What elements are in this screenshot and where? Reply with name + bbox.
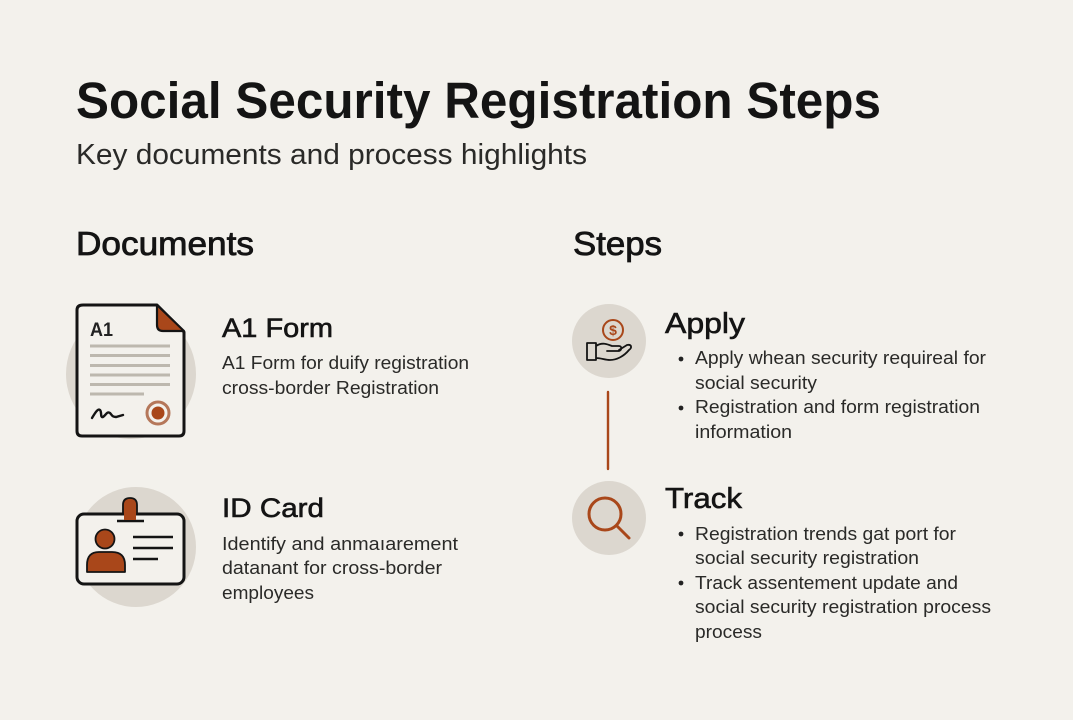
bullet list: Track — [679, 523, 991, 642]
description: A1 Form: A1 Form for duify registration — [222, 352, 469, 373]
description: A1 Form: cross-border Registration — [222, 377, 439, 398]
heading: steps: Steps — [573, 225, 662, 262]
description: ID Card: employees — [222, 582, 314, 603]
icon: hand with coin: $ — [609, 322, 617, 338]
bullet list: Track: Track assentement update and — [695, 572, 958, 593]
icon: ID card — [76, 487, 196, 607]
bullet list: Track: social security registration — [695, 547, 919, 568]
label: Track: Track — [665, 483, 743, 515]
description: ID Card — [222, 533, 458, 603]
label: ID Card: ID Card — [222, 493, 324, 523]
subtitle: Key documents and process highlights — [76, 139, 587, 171]
title: Social Security Registration Steps — [76, 72, 881, 129]
bullet list: Track: process — [695, 621, 762, 642]
bullet list: Apply — [679, 347, 986, 442]
connector line — [607, 392, 609, 469]
bullet list: Apply: Registration and form registration — [695, 396, 980, 417]
icon: magnifying glass — [572, 481, 646, 555]
bullet list: Apply: Apply whean security requireal for — [695, 347, 986, 368]
description: ID Card: datanant for cross-border — [222, 557, 442, 578]
bullet list: Track: social security registration process — [695, 596, 991, 617]
description: ID Card: Identify and anmaıarement — [222, 533, 458, 554]
bullet list: Apply: information — [695, 421, 792, 442]
bullet list: Track: Registration trends gat port for — [695, 523, 956, 544]
icon: hand with coin — [572, 304, 646, 378]
bullet list: Apply: social security — [695, 372, 818, 393]
heading: documents: Documents — [76, 225, 254, 262]
description: A1 Form — [222, 352, 469, 398]
icon: A1 form document: A1 — [90, 320, 113, 341]
label: Apply: Apply — [665, 308, 746, 340]
label: A1 Form: A1 Form — [222, 313, 333, 343]
icon: A1 form document — [66, 305, 196, 439]
